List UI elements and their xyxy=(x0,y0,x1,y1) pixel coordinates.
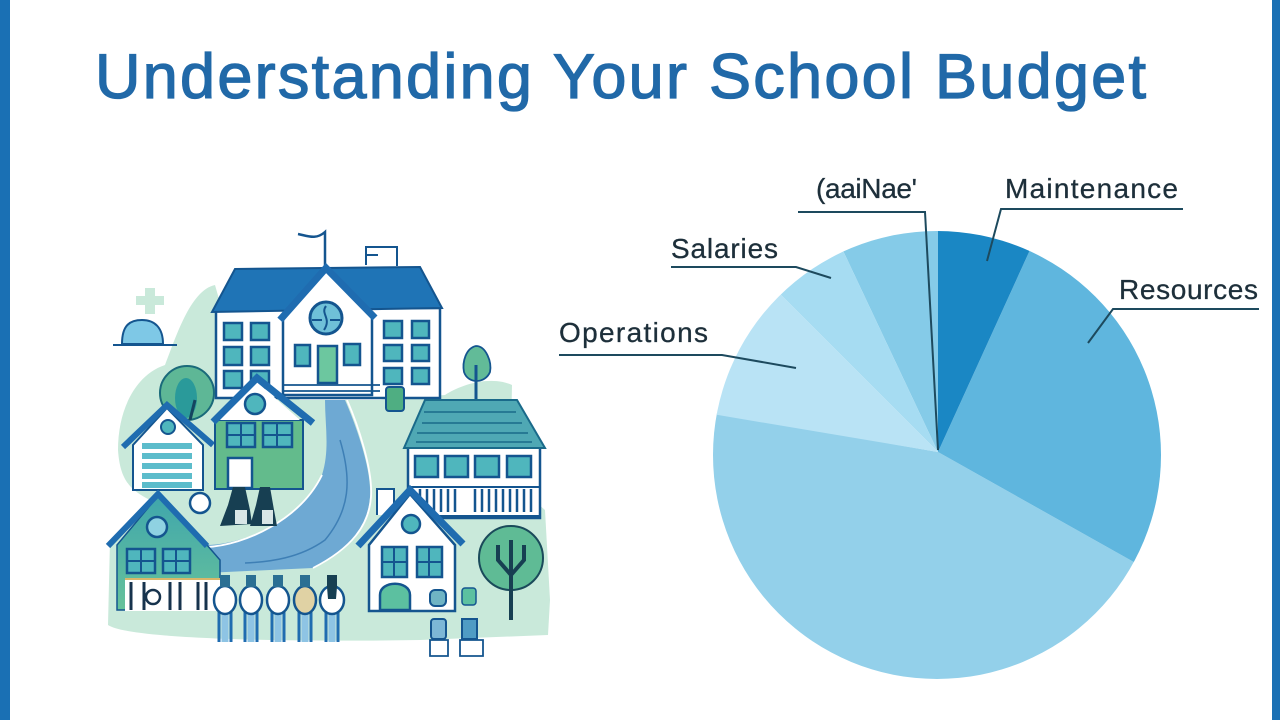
label: Resources xyxy=(1088,274,1259,343)
label: Resources: Resources xyxy=(1119,274,1258,305)
main roof xyxy=(212,267,442,312)
slice: large share xyxy=(713,413,1134,679)
roof sign xyxy=(366,247,397,266)
green background foliage xyxy=(108,285,550,641)
label: Salaries: Salaries xyxy=(671,233,778,264)
seated figures xyxy=(220,487,277,526)
house: right teal roof xyxy=(404,400,545,518)
centre gable xyxy=(283,270,372,395)
label: Maintenance: Maintenance xyxy=(1005,173,1178,204)
clock xyxy=(310,302,342,334)
right border bar xyxy=(1272,0,1280,720)
slice: unreadable label xyxy=(844,231,938,452)
pie chart xyxy=(713,231,1161,679)
slice: operations xyxy=(716,294,938,452)
label: Maintenance xyxy=(987,173,1183,261)
tree: bottom right xyxy=(479,526,543,620)
house: middle green xyxy=(213,378,313,489)
bins xyxy=(430,588,476,606)
label: garbled top label: (aaiNae' xyxy=(816,173,917,204)
clock icon xyxy=(190,493,210,513)
label: Operations: Operations xyxy=(559,317,708,348)
flag xyxy=(298,232,325,268)
icon: dome xyxy=(113,320,177,345)
road xyxy=(205,400,370,573)
slice: maintenance xyxy=(938,231,1030,452)
title: Understanding Your School Budget xyxy=(95,42,1146,112)
label: Operations xyxy=(559,317,796,368)
barrel xyxy=(386,387,404,411)
illustration: school neighbourhood xyxy=(108,232,550,656)
slice: salaries xyxy=(780,252,938,452)
label: Salaries xyxy=(671,233,831,278)
row of people xyxy=(214,575,344,642)
tree: small right xyxy=(464,346,490,402)
house: bottom-left teal xyxy=(108,494,220,611)
house: top-left white xyxy=(123,405,213,490)
chairs xyxy=(430,619,483,656)
label: garbled top label xyxy=(798,173,938,450)
slice: resources xyxy=(938,251,1161,562)
post xyxy=(377,489,394,515)
tree: left round xyxy=(160,366,214,420)
door xyxy=(318,346,337,383)
main school building xyxy=(212,232,442,398)
windows xyxy=(224,321,429,388)
road edge highlights xyxy=(207,400,371,568)
left border bar xyxy=(0,0,10,720)
steps xyxy=(283,385,380,398)
house: bottom-right white xyxy=(358,490,463,611)
